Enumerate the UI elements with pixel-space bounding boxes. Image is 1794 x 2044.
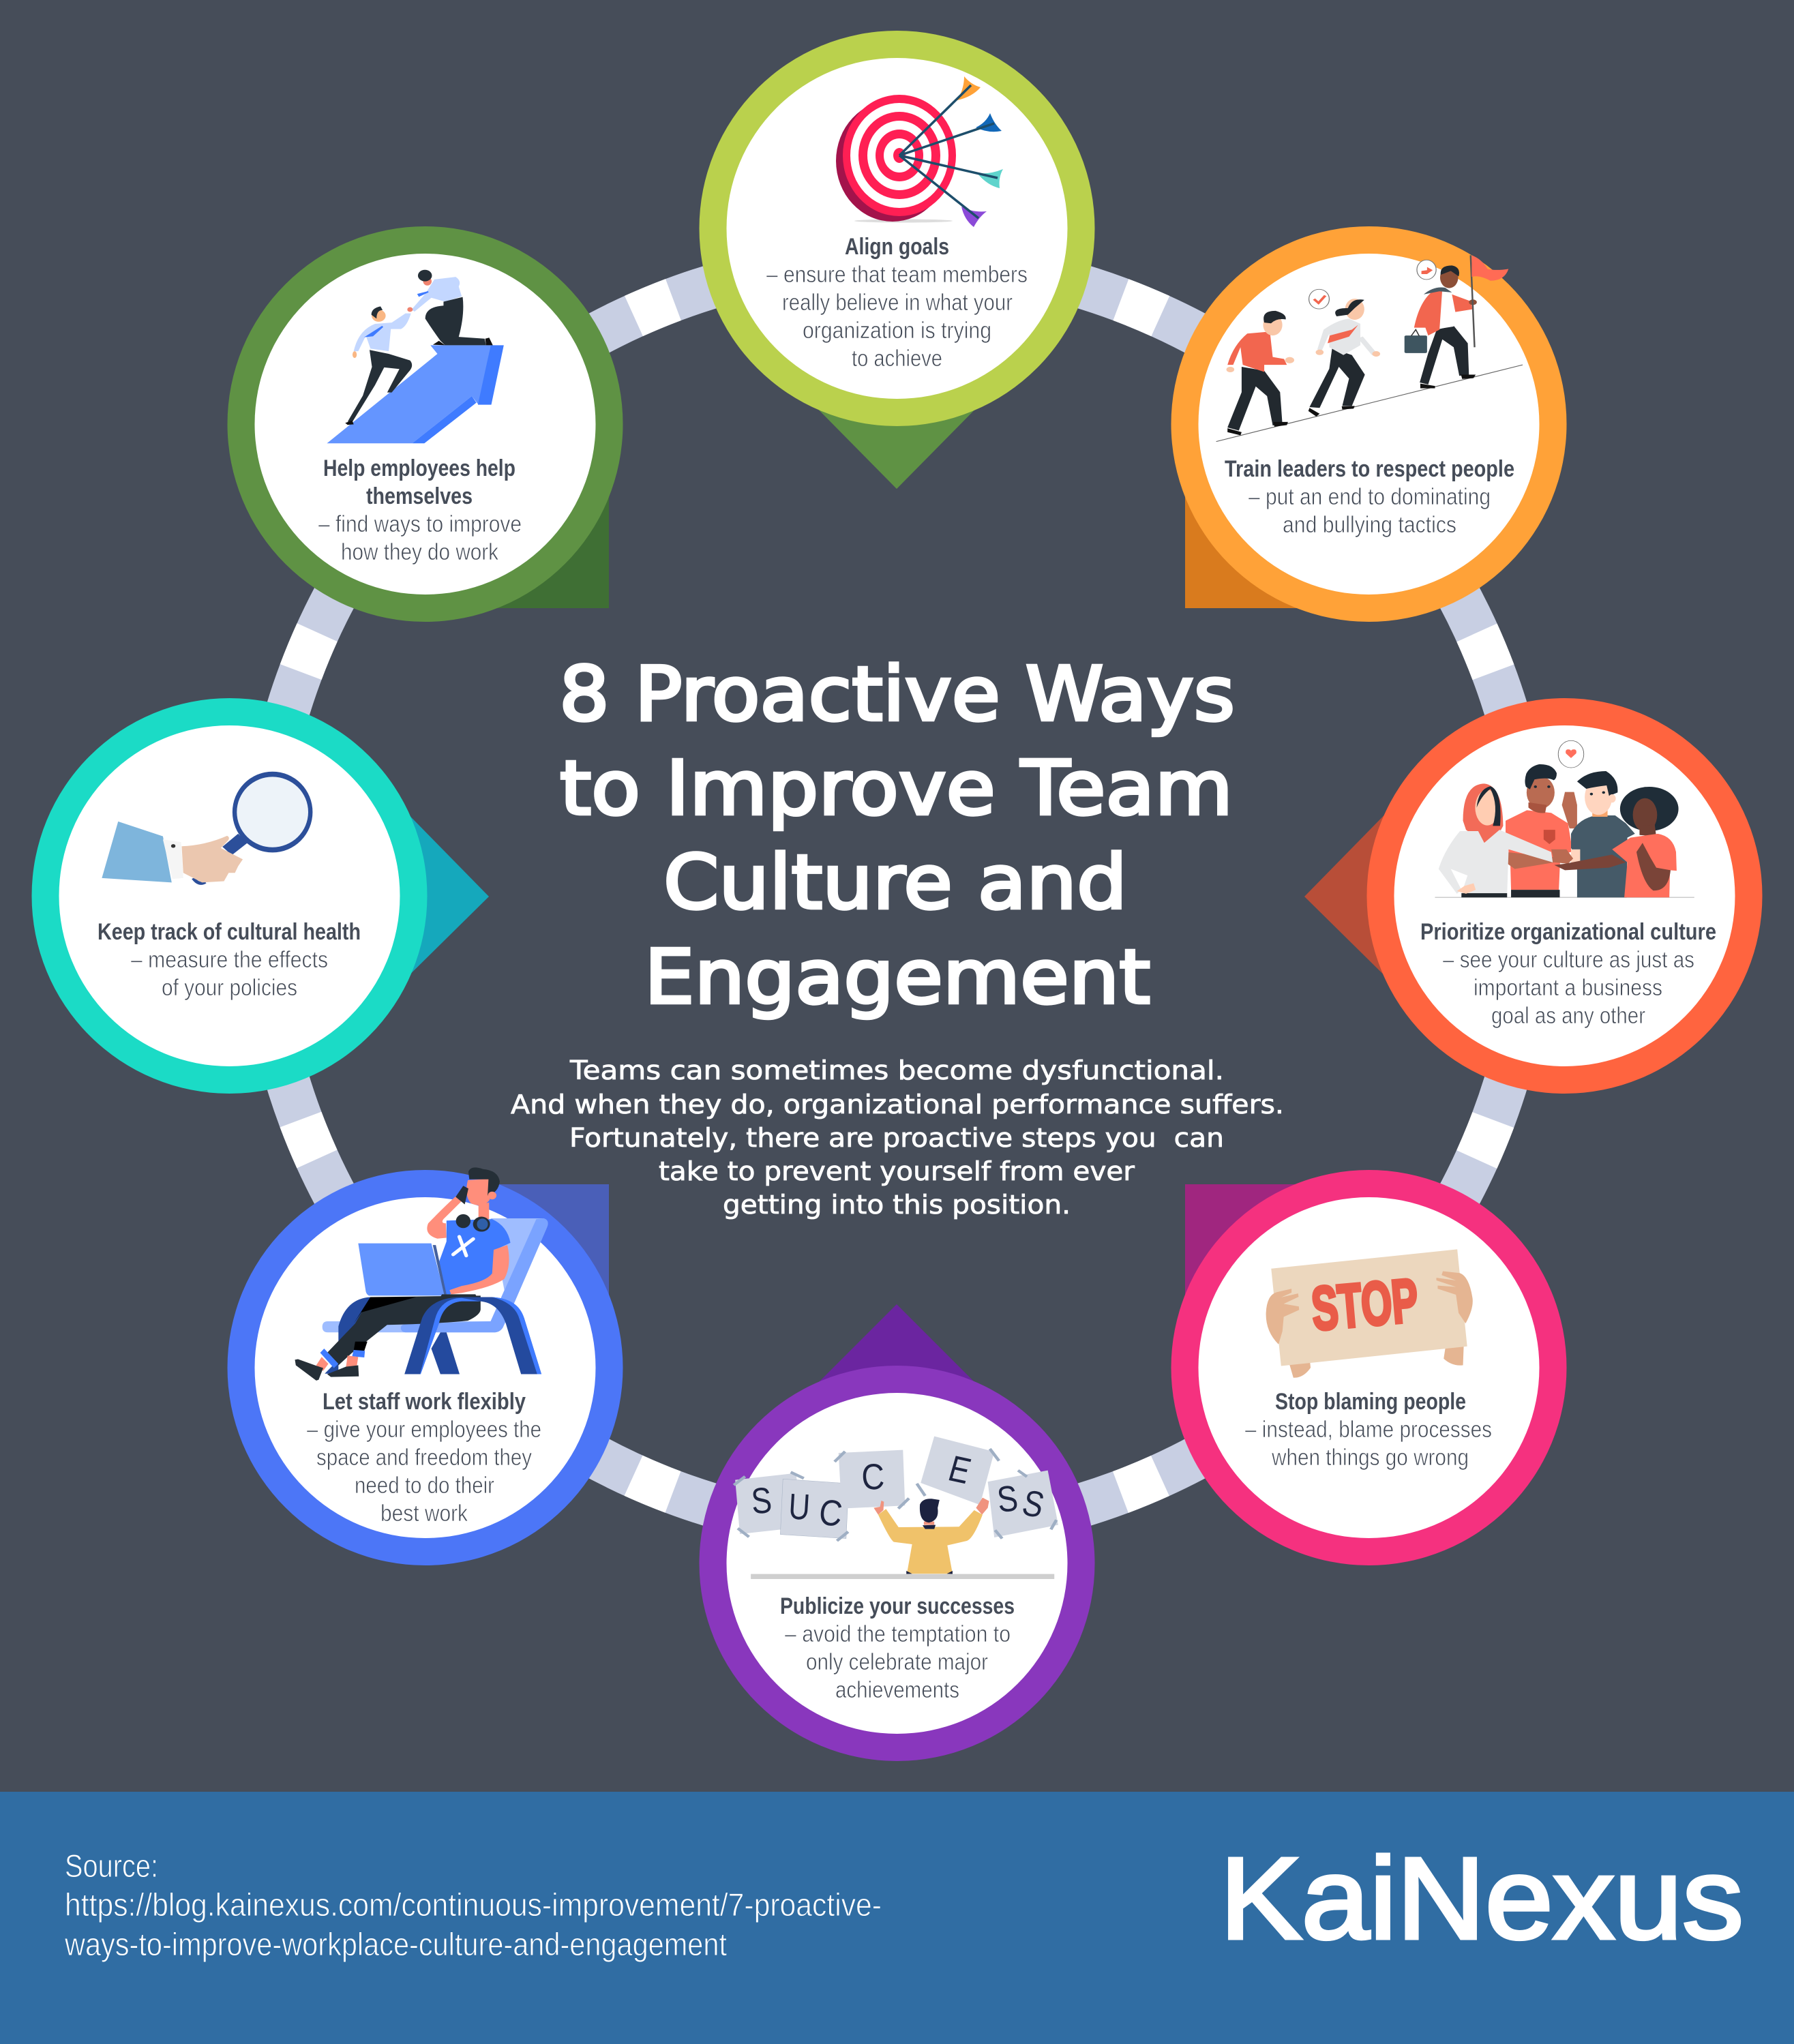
icon: team huddle <box>1435 740 1694 897</box>
icon: stop sign <box>1266 1249 1473 1378</box>
source text: ways-to-improve-workplace-culture-and-engagement <box>64 1926 727 1962</box>
intro text: take to prevent yourself from ever <box>659 1156 1135 1186</box>
panel: publicize successes <box>700 1304 1095 1761</box>
text block <box>1245 1389 1492 1471</box>
ring <box>1366 698 1762 1094</box>
text block: need to do their <box>355 1473 494 1499</box>
text block: Prioritize organizational culture <box>1420 919 1716 945</box>
text block: important a business <box>1474 975 1662 1001</box>
footer band <box>0 1792 1794 2044</box>
icon: target with darts <box>836 76 1003 227</box>
ring <box>1171 226 1567 622</box>
text block: Publicize your successes <box>780 1593 1015 1619</box>
ring <box>228 1170 623 1565</box>
source text: https://blog.kainexus.com/continuous-improvement/7-proactive- <box>65 1887 882 1923</box>
text block: really believe in what your <box>782 290 1013 316</box>
icon: success letters: C <box>817 1492 845 1535</box>
text block: goal as any other <box>1491 1003 1645 1029</box>
text block <box>307 1389 541 1527</box>
pointer <box>798 1304 996 1403</box>
title: to Improve Team <box>560 745 1233 832</box>
ring <box>31 698 427 1094</box>
icon: success letters: C <box>861 1456 885 1498</box>
pointer <box>436 1184 609 1357</box>
icon: success letters: S <box>750 1480 773 1522</box>
text block: themselves <box>366 483 473 509</box>
inner disc <box>1394 725 1735 1066</box>
icon: success letters: S <box>1019 1483 1048 1526</box>
title: Culture and <box>663 839 1127 926</box>
text block <box>1420 919 1716 1029</box>
source text <box>64 1848 882 1962</box>
intro text: And when they do, organizational performance suffers. <box>511 1089 1284 1119</box>
icon: success letters <box>734 1437 1058 1579</box>
text block: – avoid the temptation to <box>785 1621 1011 1647</box>
inner disc <box>727 1393 1068 1734</box>
logo: KaiNexus: KaiNexus <box>1220 1834 1744 1964</box>
intro text <box>511 1055 1284 1220</box>
text block: – find ways to improve <box>318 511 522 537</box>
panel: stop blaming <box>1171 1170 1567 1565</box>
text block <box>780 1593 1015 1703</box>
pointer <box>389 794 489 995</box>
text block <box>98 919 361 1001</box>
intro text: Teams can sometimes become dysfunctional. <box>569 1055 1224 1085</box>
panel: prioritize culture <box>1304 698 1762 1094</box>
text block: and bullying tactics <box>1283 512 1456 538</box>
pointer <box>1304 794 1405 995</box>
text block <box>318 455 522 565</box>
text block: to achieve <box>852 346 942 372</box>
icon: hand with magnifying glass <box>102 772 312 884</box>
intro text: Fortunately, there are proactive steps you can <box>569 1123 1224 1153</box>
title: 8 Proactive Ways <box>559 650 1235 738</box>
text block: when things go wrong <box>1271 1445 1469 1471</box>
pointer <box>1185 436 1357 608</box>
pointer <box>798 389 996 489</box>
text block: how they do work <box>341 539 499 565</box>
text block: – instead, blame processes <box>1245 1417 1492 1443</box>
text block: space and freedom they <box>316 1445 532 1471</box>
panel: cultural health <box>31 698 489 1094</box>
text block: only celebrate major <box>806 1649 988 1675</box>
pointer <box>1185 1184 1357 1357</box>
text block: organization is trying <box>803 318 991 344</box>
text block: – ensure that team members <box>766 262 1028 288</box>
text block <box>766 234 1028 372</box>
striped connector ring <box>260 259 1534 1533</box>
text block: best work <box>380 1501 468 1527</box>
pointer <box>436 436 609 608</box>
text block: Stop blaming people <box>1275 1389 1466 1415</box>
ring <box>700 1366 1095 1761</box>
title <box>559 650 1235 1021</box>
icon: success letters: S <box>995 1478 1020 1520</box>
icon: people climbing a slope <box>1216 255 1523 442</box>
panel: align goals <box>700 31 1095 489</box>
panel: help employees <box>228 226 623 622</box>
panel: train leaders <box>1171 226 1567 622</box>
text block: – give your employees the <box>307 1417 541 1443</box>
text block: – put an end to dominating <box>1249 484 1491 510</box>
inner disc <box>255 1197 596 1538</box>
icon: success letters: E <box>944 1448 975 1492</box>
text block: of your policies <box>162 975 297 1001</box>
icon: success letters: U <box>788 1486 811 1528</box>
icon: stop sign: STOP <box>1309 1267 1421 1344</box>
text block: Help employees help <box>323 455 515 481</box>
text block: achievements <box>835 1677 959 1703</box>
inner disc <box>59 725 400 1066</box>
text block: Keep track of cultural health <box>98 919 361 945</box>
inner disc <box>255 254 596 595</box>
icon: person on lounge chair with laptop <box>295 1167 548 1381</box>
text block: Train leaders to respect people <box>1225 456 1514 482</box>
text block: Align goals <box>845 234 949 260</box>
icon: two men on rising arrow <box>327 270 504 443</box>
intro text: getting into this position. <box>723 1190 1071 1220</box>
ring <box>700 31 1095 426</box>
inner disc <box>727 58 1068 399</box>
text block: Let staff work flexibly <box>323 1389 526 1415</box>
inner disc <box>1199 1197 1540 1538</box>
source text: Source: <box>65 1848 158 1884</box>
text block <box>1225 456 1514 538</box>
text block: – measure the effects <box>131 947 328 973</box>
ring <box>228 226 623 622</box>
title: Engagement <box>644 933 1150 1021</box>
ring <box>1171 1170 1567 1565</box>
inner disc <box>1199 254 1540 595</box>
text block: – see your culture as just as <box>1443 947 1694 973</box>
panel: flexible work <box>228 1167 623 1565</box>
